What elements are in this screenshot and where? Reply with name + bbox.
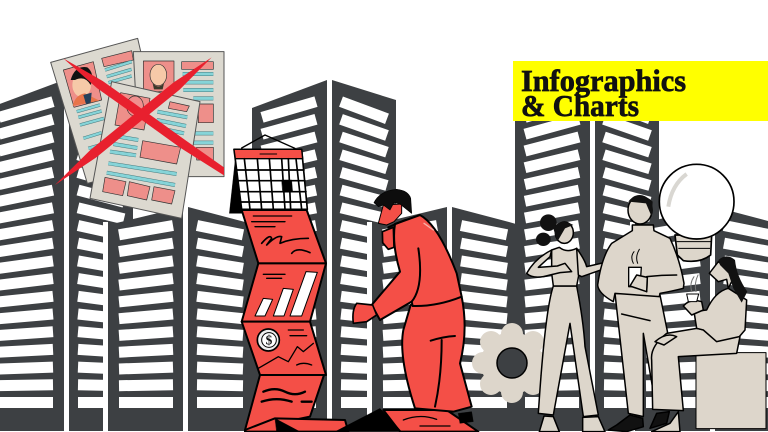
hand bbox=[353, 303, 377, 323]
coffee cup bbox=[629, 267, 641, 287]
pants details bbox=[431, 336, 455, 407]
gear icon bbox=[472, 323, 552, 403]
bulb highlight bbox=[668, 174, 687, 207]
woman right seated bbox=[652, 256, 747, 411]
calendar bbox=[234, 149, 307, 209]
lightbulb bbox=[659, 164, 734, 261]
title text: Infographics: Infographics bbox=[521, 63, 686, 98]
woman left bbox=[527, 214, 625, 432]
bar chart bbox=[255, 272, 317, 316]
folded report with calendar bbox=[229, 135, 478, 432]
shoe bbox=[458, 412, 473, 423]
man looking at report bbox=[353, 189, 473, 423]
black fold bbox=[275, 408, 402, 432]
report panels bbox=[242, 210, 478, 432]
collar bbox=[388, 220, 405, 227]
resume: back left bbox=[51, 38, 167, 183]
face bbox=[378, 204, 402, 225]
title text: & Charts: & Charts bbox=[521, 88, 639, 123]
box seat bbox=[696, 353, 766, 429]
coin icon bbox=[257, 329, 279, 351]
coin icon: $ bbox=[266, 333, 273, 348]
calendar backing bbox=[229, 162, 243, 213]
team of three people bbox=[527, 195, 766, 432]
shirt highlight bbox=[424, 223, 433, 230]
calendar hanger bbox=[242, 135, 295, 148]
red cross bbox=[55, 57, 224, 185]
title banner bbox=[513, 61, 768, 123]
chin hand bbox=[382, 227, 394, 249]
man centre bbox=[598, 195, 684, 432]
inner arm line bbox=[412, 248, 420, 302]
legs bbox=[402, 297, 472, 412]
panel scribbles bbox=[252, 216, 450, 426]
crossed-out resumes bbox=[51, 38, 224, 218]
torso and arm bbox=[372, 215, 462, 320]
resume: front bbox=[90, 82, 200, 218]
hair bbox=[374, 189, 412, 213]
resume: back right bbox=[133, 52, 224, 177]
